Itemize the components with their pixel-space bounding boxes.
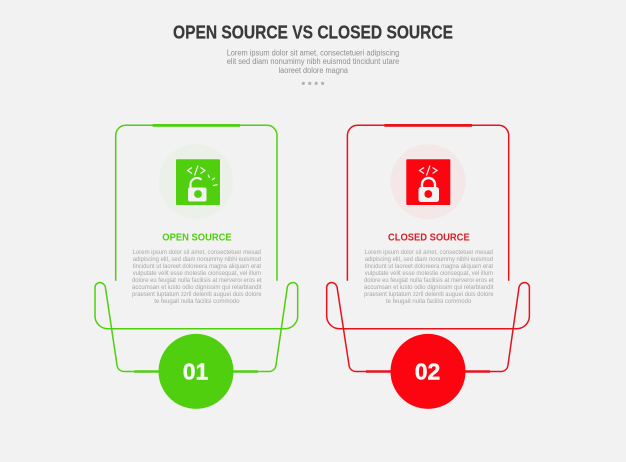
body text: praesent luptatum zzril deleniti auguei duis dolore [364, 291, 494, 298]
tray outline connector [327, 282, 529, 372]
panel: open source [95, 124, 298, 409]
card outline [116, 125, 277, 281]
subtitle text: laoreet dolore magna [278, 66, 349, 75]
body text: vulputate velit esse molestie cionsequat, vel illum [133, 270, 261, 277]
pagination dots [302, 82, 324, 85]
body text: te feugait nulla facilisi commodo [386, 298, 472, 305]
subtitle text: Lorem ipsum dolor sit amet, consectetueri adipiscing [227, 48, 399, 57]
card outline [347, 125, 509, 281]
number badge [158, 334, 234, 409]
connector accents [134, 370, 258, 373]
heading: OPEN SOURCE [162, 232, 232, 244]
number badge: 02 [415, 358, 440, 384]
body text: dolore eu feugiat nulla facilisis at merveroi eros et [364, 277, 494, 284]
number badge [390, 334, 466, 409]
top accent bar [153, 124, 240, 127]
number badge: 01 [183, 358, 208, 384]
body text: tincidunt ut laoreet doloreera magna aliquam erat [365, 263, 493, 270]
connector accents [366, 370, 490, 373]
icon: open padlock with code [158, 144, 234, 219]
body text: tincidunt ut laoreet doloreera magna aliquam erat [133, 263, 261, 270]
body text: praesent luptatum zzril deleniti auguei duis dolore [132, 291, 262, 298]
body text: Lorem ipsum dolor sit amet, consectetuer mesad [133, 249, 262, 256]
body text: vulputate velit esse molestie cionsequat, vel illum [365, 270, 493, 277]
body text: accumsan et iusto odio dignissim qui relarblandit [132, 284, 262, 291]
body text: adipiscing elit, sed diam nonummy nibhi euismod [365, 256, 494, 263]
tray outline connector [95, 282, 298, 372]
panel: closed source [327, 124, 529, 409]
body text: te feugait nulla facilisi commodo [154, 298, 240, 305]
title: OPEN SOURCE VS CLOSED SOURCE [173, 22, 453, 42]
body text: dolore eu feugiat nulla facilisis at merveroi eros et [132, 277, 262, 284]
body text: accumsan et iusto odio dignissim qui relarblandit [364, 284, 494, 291]
heading: CLOSED SOURCE [388, 232, 470, 244]
icon: closed padlock with code [390, 144, 466, 219]
body text [132, 249, 262, 305]
top accent bar [384, 124, 472, 127]
body text [364, 249, 494, 305]
subtitle text: elit sed diam nonumimy nibh euismod tincidunt utare [227, 57, 399, 66]
body text: adipiscing elit, sed diam nonummy nibhi euismod [133, 256, 262, 263]
body text: Lorem ipsum dolor sit amet, consectetuer mesad [365, 249, 494, 256]
subtitle text [227, 48, 399, 75]
